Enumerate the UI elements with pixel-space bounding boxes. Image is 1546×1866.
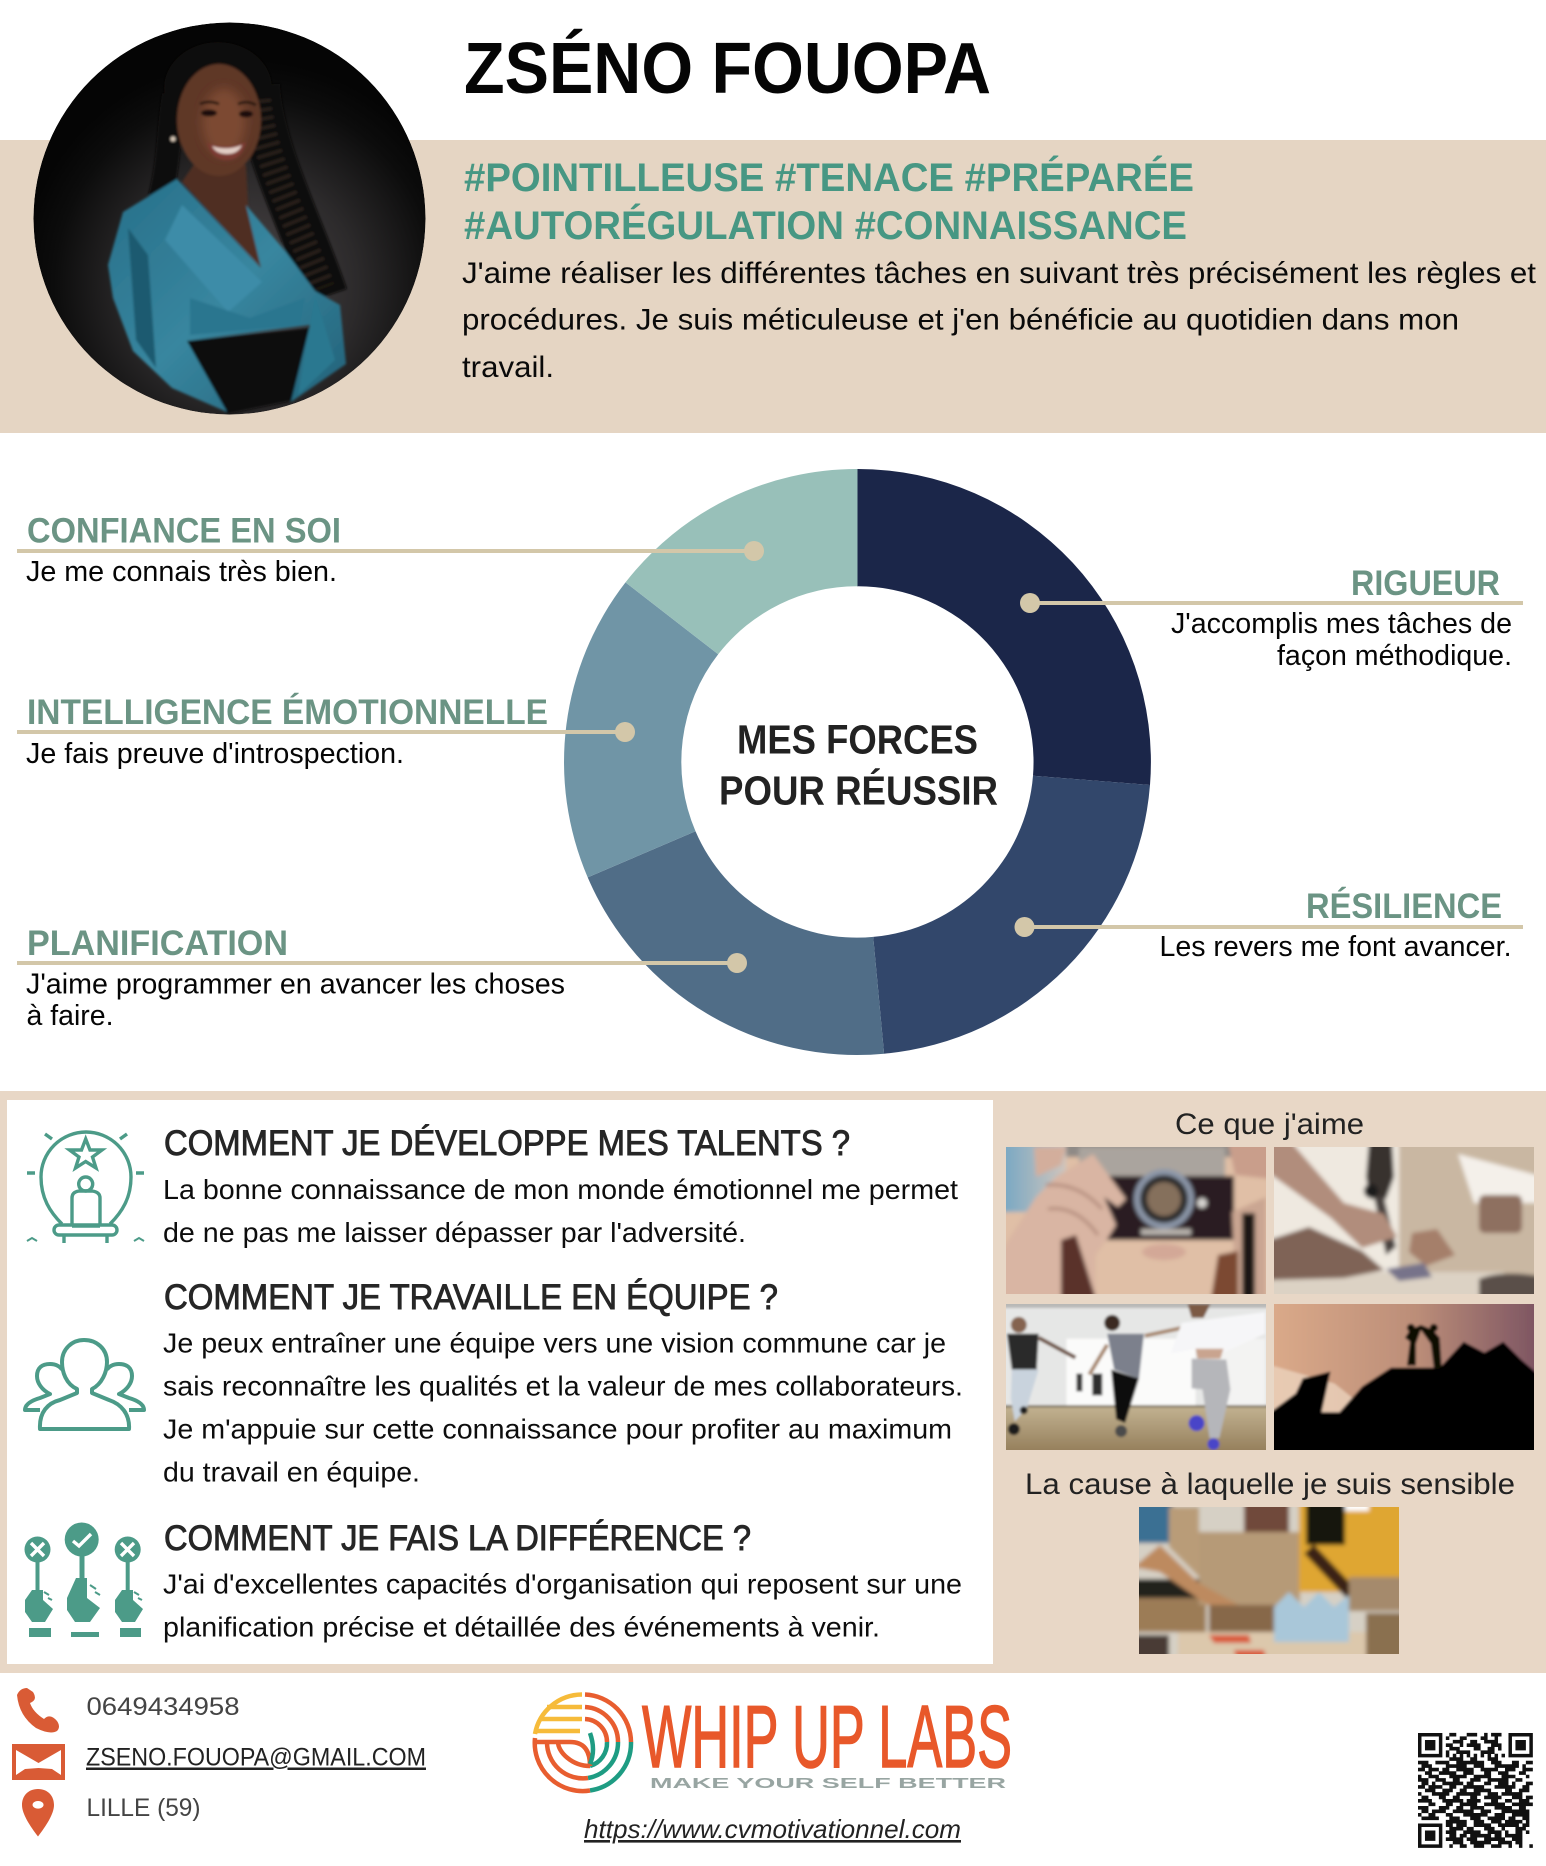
right braids: [258, 85, 326, 296]
text: talents: La bonne connaissance de mon monde émotionnel me permet: [163, 1174, 958, 1205]
title: ZSÉNO FOUOPA: [464, 29, 991, 109]
blouse: [108, 179, 346, 412]
text: equipe: Je m'appuie sur cette connaissance pour profiter au maximum: [163, 1414, 952, 1444]
photo: sewing: [1274, 1147, 1534, 1294]
text: equipe: sais reconnaître les qualités et la valeur de mes collaborateurs.: [163, 1370, 963, 1402]
icon: envelope: [12, 1744, 65, 1780]
heading: difference: COMMENT JE FAIS LA DIFFÉRENCE ?: [164, 1519, 751, 1558]
photo: donation boxes: [1139, 1507, 1399, 1654]
callout: rigueur: façon méthodique.: [1277, 640, 1512, 672]
callout: confiance en soi: CONFIANCE EN SOI: [27, 512, 341, 550]
donut center title: [719, 716, 998, 814]
website link: https://www.cvmotivationnel.com: [584, 1814, 961, 1844]
donut center title: MES FORCES: [737, 716, 978, 762]
left braids: [160, 95, 174, 198]
face: [177, 64, 261, 176]
text: difference: planification précise et détaillée des événements à venir.: [163, 1612, 880, 1642]
text: location: LILLE (59): [86, 1794, 200, 1822]
skirt: [187, 328, 310, 414]
neck and chest: [182, 164, 259, 263]
QR code: [1418, 1733, 1533, 1848]
callout: resilience: [1014, 886, 1523, 963]
callout: planification: à faire.: [26, 1000, 114, 1032]
callout: planification: J'aime programmer en avancer les choses: [26, 968, 565, 1000]
callout: intelligence emotionnelle: INTELLIGENCE ÉMOTIONNELLE: [27, 692, 548, 732]
intro paragraph: travail.: [462, 351, 554, 384]
heading: talents: COMMENT JE DÉVELOPPE MES TALENTS ?: [164, 1124, 850, 1163]
intro paragraph: J'aime réaliser les différentes tâches en suivant très précisément les règles et: [462, 257, 1537, 290]
icon: light bulb with star and person: [27, 1132, 144, 1243]
text: equipe: Je peux entraîner une équipe vers une vision commune car je: [163, 1328, 946, 1358]
callout: resilience: Les revers me font avancer.: [1160, 931, 1512, 963]
callout: confiance en soi: Je me connais très bien.: [26, 556, 337, 588]
text: difference: J'ai d'excellentes capacités d'organisation qui reposent sur une: [163, 1568, 962, 1600]
hashtags: [464, 155, 1194, 248]
donut center title: POUR RÉUSSIR: [719, 768, 998, 814]
logo: Whip Up Labs: [535, 1687, 1012, 1792]
intro paragraph: [462, 257, 1537, 384]
text: email: ZSENO.FOUOPA@GMAIL.COM: [86, 1744, 426, 1772]
callout: resilience: RÉSILIENCE: [1306, 886, 1502, 926]
text: equipe: du travail en équipe.: [163, 1456, 420, 1488]
callout: rigueur: [1020, 564, 1523, 672]
hashtags: #AUTORÉGULATION #CONNAISSANCE: [464, 203, 1187, 248]
text: equipe: [163, 1328, 963, 1488]
callout: planification: [17, 924, 747, 1032]
text: difference: [163, 1568, 962, 1642]
callout: intelligence emotionnelle: Je fais preuve d'introspection.: [26, 738, 404, 770]
logo: Whip Up Labs: MAKE YOUR SELF BETTER: [650, 1776, 1007, 1792]
photo: mountain silhouettes: [1274, 1304, 1534, 1450]
callout: rigueur: RIGUEUR: [1351, 564, 1500, 603]
icon: phone: [17, 1688, 59, 1732]
icon: joysticks: [24, 1522, 143, 1637]
heading: equipe: COMMENT JE TRAVAILLE EN ÉQUIPE ?: [164, 1278, 778, 1317]
text: talents: de ne pas me laisser dépasser par l'adversité.: [163, 1217, 746, 1248]
hair top: [162, 62, 273, 98]
text: phone number: 0649434958: [86, 1693, 240, 1721]
text: talents: [163, 1174, 958, 1248]
photo: camera: [1006, 1147, 1266, 1294]
callout: confiance en soi: [17, 512, 764, 588]
callout: planification: PLANIFICATION: [27, 924, 288, 963]
hashtags: #POINTILLEUSE #TENACE #PRÉPARÉE: [464, 155, 1194, 200]
heading: ce que j'aime: Ce que j'aime: [1175, 1108, 1364, 1141]
callout: rigueur: J'accomplis mes tâches de: [1171, 608, 1512, 640]
bottom band: [0, 1091, 1546, 1673]
heading: cause: La cause à laquelle je suis sensible: [1025, 1468, 1515, 1501]
donut chart: [564, 469, 1151, 1055]
intro paragraph: procédures. Je suis méticuleuse et j'en bénéficie au quotidien dans mon: [462, 304, 1459, 336]
white panel: [7, 1100, 993, 1664]
portrait photo: [34, 22, 426, 414]
callout: intelligence emotionnelle: [17, 692, 635, 770]
icon: location pin: [22, 1789, 54, 1836]
logo: Whip Up Labs: WHIP UP LABS: [642, 1687, 1012, 1786]
icon: team: [25, 1340, 144, 1429]
photo: dancers: [1006, 1304, 1266, 1450]
header band: [0, 140, 1546, 433]
